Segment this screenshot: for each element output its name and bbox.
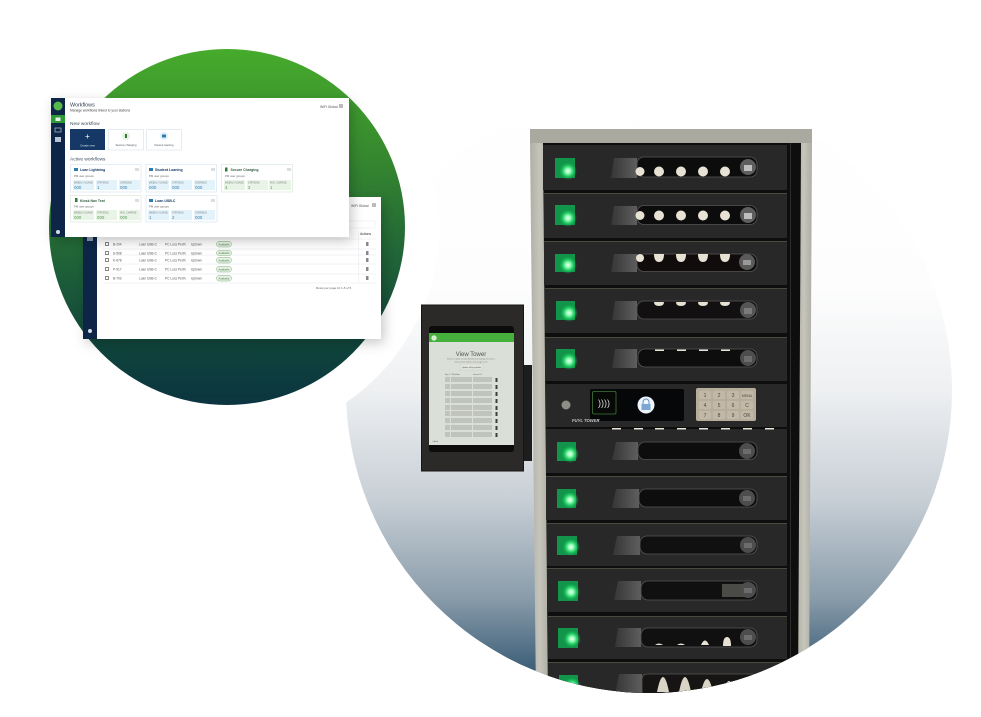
display screen [590, 389, 684, 421]
keypad: 2 [718, 393, 721, 399]
keypad: 8 [718, 413, 721, 419]
inventory table: Loan USB-C [139, 258, 158, 262]
workflow card: Loan Lightning: OVERDUE [120, 182, 132, 184]
workflow card: Student Loaning: 000 [149, 185, 157, 190]
tablet frame [422, 305, 524, 471]
page title [70, 102, 343, 112]
brand label: FUYL TOWER [572, 418, 600, 423]
workflow card: Loan USB-C: 2 [172, 215, 175, 220]
tablet bracket [520, 365, 532, 461]
pagination: Rows per page 10 1-5 of 5 [316, 286, 352, 290]
inventory table: PC Locs Perth [165, 276, 186, 280]
workflow card: Student Loaning: WEEKLY USAGE [149, 182, 168, 184]
inventory table: B-204 [113, 242, 122, 246]
workflow card: Loan Lightning: WEEKLY USAGE [74, 182, 93, 184]
inventory table: Available [218, 242, 230, 246]
workflow card: Secure Charging: 2 [248, 185, 251, 190]
workflow card: Secure Charging: Secure Charging [230, 168, 259, 172]
new workflow buttons: Secure charging [115, 143, 137, 147]
inventory table: PC Locs Perth [165, 252, 186, 256]
inventory table: PC Locs Perth [165, 258, 186, 262]
keypad: C [745, 403, 749, 409]
tablet list rows [445, 377, 492, 437]
keypad: OK [743, 413, 751, 419]
tower dark body [543, 143, 801, 700]
tablet screen [429, 333, 514, 445]
workflow card: Student Loaning: 000 [195, 185, 203, 190]
inventory table: B-703 [113, 276, 122, 280]
locker tower [530, 129, 812, 700]
workflow card: Loan USB-C: 000 [195, 215, 203, 220]
keypad: 3 [732, 393, 735, 399]
workflow card: Kiosk Nav Test [70, 196, 141, 222]
workflow card: Student Loaning [146, 164, 216, 192]
drawer 10 [548, 616, 787, 659]
workflow card: Loan USB-C: 1 [149, 215, 152, 220]
inventory table: Uptown [191, 276, 202, 280]
workflow card: Kiosk Nav Test: 000 [74, 215, 82, 220]
workflow card: Kiosk Nav Test: STATIONS [97, 212, 109, 214]
green gradient circle [49, 49, 405, 405]
inventory table: Available [218, 267, 230, 271]
workflow card: Kiosk Nav Test: 000 [120, 215, 128, 220]
page title: Manage workflows linked to your stations [70, 108, 130, 112]
inventory table: Uptown [191, 252, 202, 256]
workflow card: Loan Lightning [70, 164, 141, 192]
workflow card: Loan USB-C: OVERDUE [195, 212, 207, 214]
inventory table: K-678 [113, 258, 122, 262]
workflow card: Loan Lightning: 000 [74, 185, 82, 190]
NFC reader icon: )))) [598, 398, 610, 408]
back screen sidebar [83, 197, 97, 339]
inventory table: Loan USB-C [139, 268, 158, 272]
keypad [696, 388, 756, 421]
workflow card: Loan USB-C: WEEKLY USAGE [149, 212, 168, 214]
back screen header [100, 203, 376, 228]
drawer 8 [547, 523, 787, 566]
keypad: MENU [742, 394, 753, 398]
tower left rail [530, 140, 549, 700]
control panel [546, 384, 787, 427]
workflow card: Secure Charging: STATIONS [248, 182, 260, 184]
back dashboard screen: inventory table [83, 197, 381, 339]
workflow card: Student Loaning: STATIONS [172, 182, 184, 184]
workflow card: Loan USB-C: PM user groups [149, 204, 169, 208]
tablet screen: View Tower [456, 352, 486, 358]
inventory table: PC Locs Perth [165, 268, 186, 272]
keypad: 7 [704, 413, 707, 419]
drawer 1 [543, 145, 787, 190]
workflow card: Secure Charging: PM user groups [225, 174, 245, 178]
tablet screen: Bay # / Workflow [445, 374, 461, 376]
front screen sidebar [51, 98, 65, 237]
workflow card: Secure Charging [222, 164, 292, 192]
workflow card: Kiosk Nav Test: WEEKLY USAGE [74, 212, 93, 214]
drawer 3 [544, 241, 787, 285]
workflow card: Loan USB-C [146, 196, 217, 222]
background circle: gradient behind tower [346, 87, 952, 693]
front dashboard screen: workflows [51, 98, 349, 237]
keypad: 4 [704, 403, 707, 409]
workflow card: Student Loaning: OVERDUE [195, 182, 207, 184]
inventory table [103, 231, 376, 283]
inventory table: Actions [360, 232, 371, 236]
workflow card: Loan Lightning: PM user groups [74, 174, 94, 178]
page title: WiFi Global [320, 105, 338, 109]
tablet screen: Select a station to view details and manage its lockers [447, 358, 495, 360]
workflow card: Secure Charging: WEEKLY USAGE [225, 182, 244, 184]
tablet screen: Update all bay details [462, 366, 481, 369]
tablet screen: status of the station and assign users [454, 360, 488, 364]
drawer 9 [547, 568, 787, 612]
workflow card: Student Loaning: 000 [172, 185, 180, 190]
workflow card: Secure Charging: 4 [225, 185, 228, 190]
drawer 5 [545, 337, 787, 381]
workflow card: Loan USB-C: Loan USB-C [155, 199, 176, 203]
workflow card: Secure Charging: AVG. CHARGE [270, 182, 287, 184]
inventory table: Available [218, 258, 230, 262]
drawer 6 [546, 428, 787, 473]
lock icon on display [638, 396, 654, 414]
back screen header: WiFi Global [351, 204, 369, 208]
new workflow buttons: Create new [80, 144, 96, 148]
new workflow buttons [70, 129, 182, 150]
workflow card: Kiosk Nav Test: AVG. CHARGE [120, 212, 137, 214]
tablet screen: < Back [432, 440, 438, 443]
drawer 2 [544, 193, 787, 238]
workflow card: Student Loaning: Student Loaning [155, 168, 183, 172]
inventory table: Available [218, 276, 230, 280]
page title: Workflows [70, 102, 95, 108]
inventory table: Loan USB-C [139, 252, 158, 256]
tower top cap [530, 129, 812, 143]
inventory table: Uptown [191, 258, 202, 262]
inventory table: P-917 [113, 268, 122, 272]
lock key [562, 400, 570, 410]
inventory table: Uptown [191, 242, 202, 246]
workflow card: Loan Lightning: 1 [97, 185, 100, 190]
workflow card: Loan Lightning: Loan Lightning [80, 168, 105, 172]
workflow card: Kiosk Nav Test: Kiosk Nav Test [80, 199, 106, 203]
wall-mounted tablet kiosk [422, 305, 532, 471]
workflow card: Loan USB-C: STATIONS [172, 212, 184, 214]
workflow card: Secure Charging: 1 [270, 185, 273, 190]
inventory table: PC Locs Perth [165, 242, 186, 246]
drawer 7 [546, 476, 787, 520]
drawer 11 [548, 662, 782, 693]
keypad: 6 [732, 403, 735, 409]
drawer 4 [545, 288, 787, 333]
tower right rail [797, 143, 812, 654]
keypad: 1 [704, 393, 707, 399]
new workflow buttons: + [85, 132, 90, 141]
keypad: 5 [718, 403, 721, 409]
workflow card: Student Loaning: PM user groups [149, 174, 169, 178]
inventory table: S-508 [113, 252, 122, 256]
tablet screen: Device ID [473, 374, 482, 376]
workflow card: Kiosk Nav Test: PM user groups [74, 204, 94, 208]
inventory table: Loan USB-C [139, 276, 158, 280]
workflow card: Loan Lightning: 000 [120, 185, 128, 190]
workflow card: Loan Lightning: STATIONS [97, 182, 109, 184]
heading: active workflows: Active workflows [70, 156, 106, 162]
keypad: 9 [732, 413, 735, 419]
inventory table: Available [218, 251, 230, 255]
NFC reader icon [592, 392, 616, 414]
white ring around green circle [15, 15, 439, 439]
workflow card: Kiosk Nav Test: 000 [97, 215, 105, 220]
heading: new workflow: New workflow [70, 121, 100, 127]
new workflow buttons: Device loaning [155, 143, 174, 147]
inventory table: Loan USB-C [139, 242, 158, 246]
inventory table: Uptown [191, 268, 202, 272]
